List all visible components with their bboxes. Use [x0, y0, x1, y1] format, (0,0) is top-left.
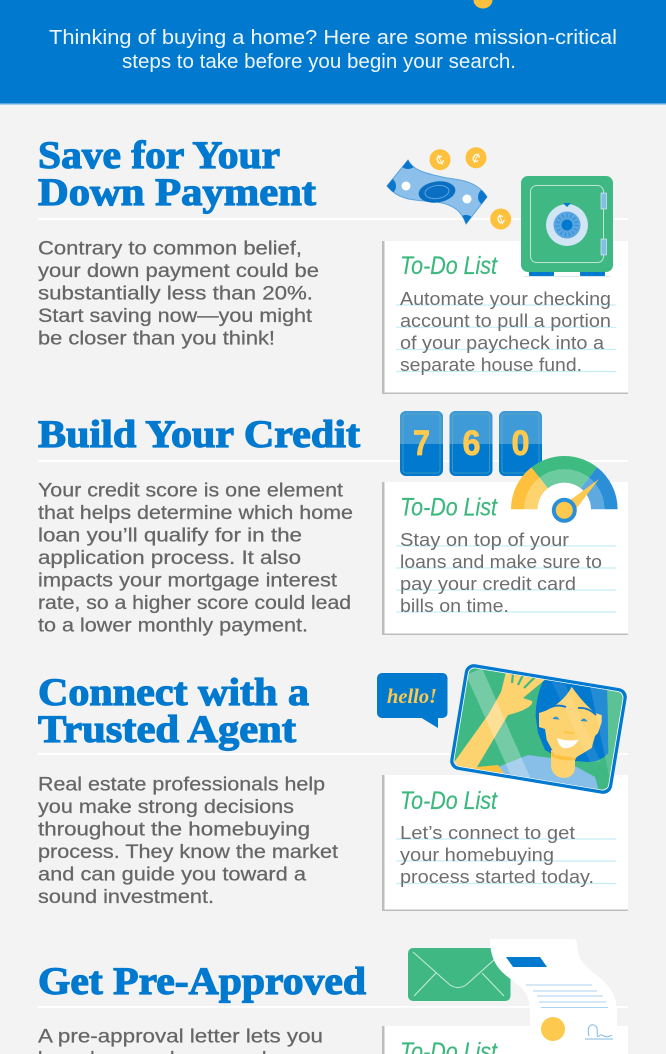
section: save for your down payment — [38, 134, 628, 394]
body text: save: be closer than you think! — [38, 328, 275, 350]
to-do card: connect: your homebuying — [400, 845, 554, 865]
body text: connect: sound investment. — [38, 887, 214, 908]
to-do card: pre-approved — [382, 1026, 628, 1054]
body text: save: your down payment could be — [38, 261, 319, 282]
heading: save — [38, 134, 316, 214]
icon: coins: ¢ — [468, 149, 483, 168]
body text: save — [38, 238, 319, 350]
to-do card: connect: process started today. — [400, 867, 594, 887]
intro text: Thinking of buying a home? Here are some mission-critical — [49, 27, 617, 49]
heading: connect: Connect with a — [38, 671, 309, 714]
icon: hello speech bubble: hello! — [387, 684, 437, 708]
heading: connect: Trusted Agent — [38, 708, 296, 751]
body text: pre-approved — [38, 1026, 323, 1054]
icon: score tiles 760: 7 — [413, 424, 430, 463]
to-do card: save — [382, 241, 628, 394]
to-do card: connect: Let’s connect to get — [400, 823, 575, 843]
body text: credit: rate, so a higher score could lead — [38, 593, 351, 614]
body text: credit: to a lower monthly payment. — [38, 616, 308, 636]
to-do card: save: account to pull a portion — [400, 311, 611, 331]
body text: credit: impacts your mortgage interest — [38, 570, 338, 592]
body text: credit: that helps determine which home — [38, 503, 353, 524]
to-do card: save: To-Do List — [400, 252, 498, 280]
icon: coins — [430, 147, 511, 230]
to-do card: save: of your paycheck into a — [400, 333, 605, 353]
to-do card: credit — [382, 482, 628, 635]
intro text: steps to take before you begin your search. — [122, 51, 516, 73]
icon: score tiles 760: 6 — [462, 424, 480, 463]
icon: credit gauge — [511, 456, 618, 523]
icon: coins: ¢ — [433, 151, 448, 170]
icon: safe — [521, 176, 613, 277]
icon: hello speech bubble — [377, 673, 448, 728]
body text: connect: process. They know the market — [38, 842, 339, 863]
to-do card: credit: loans and make sure to — [400, 552, 602, 572]
to-do card: credit: To-Do List — [400, 494, 498, 522]
to-do card: credit: pay your credit card — [400, 574, 576, 594]
body text: save: Start saving now—you might — [38, 306, 313, 327]
body text: connect: and can guide you toward a — [38, 864, 306, 886]
body text: credit: Your credit score is one element — [38, 480, 344, 502]
heading: pre-approved: Get Pre-Approved — [38, 960, 366, 1003]
icon: dollar bill — [386, 159, 488, 225]
icon: score tiles 760: 0 — [512, 424, 530, 463]
intro text — [49, 27, 617, 73]
to-do card: connect: To-Do List — [400, 787, 498, 815]
body text: credit: loan you’ll qualify for in the — [38, 526, 302, 546]
heading: save: Down Payment — [38, 171, 316, 214]
heading: save: Save for Your — [38, 134, 280, 177]
heading: credit: Build Your Credit — [38, 413, 360, 456]
body text: pre-approved: A pre-approval letter lets you — [38, 1026, 323, 1048]
body text: credit: application process. It also — [38, 548, 301, 569]
section: build your credit — [38, 411, 628, 636]
body text: connect: Real estate professionals help — [38, 774, 325, 796]
icon: approval letter — [490, 939, 617, 1050]
section: connect with a trusted agent — [38, 650, 640, 911]
icon: green envelope — [408, 948, 510, 1001]
section: get pre-approved — [38, 939, 628, 1054]
icon: score tiles 760 — [400, 411, 542, 476]
icon: coins: ¢ — [494, 211, 508, 229]
heading: connect — [38, 671, 309, 751]
body text: save: substantially less than 20%. — [38, 284, 313, 304]
body text: save: Contrary to common belief, — [38, 238, 302, 260]
to-do card: credit: bills on time. — [400, 596, 509, 616]
to-do card: credit: Stay on top of your — [400, 530, 569, 550]
body text: connect: throughout the homebuying — [38, 820, 310, 840]
body text: connect — [38, 774, 339, 908]
to-do card: save: Automate your checking — [400, 289, 611, 309]
body text: credit — [38, 480, 353, 636]
header banner — [0, 0, 666, 104]
to-do card: connect — [382, 775, 628, 911]
to-do card: save: separate house fund. — [400, 355, 582, 375]
body text: connect: you make strong decisions — [38, 797, 294, 818]
icon: video call photo — [450, 664, 627, 794]
